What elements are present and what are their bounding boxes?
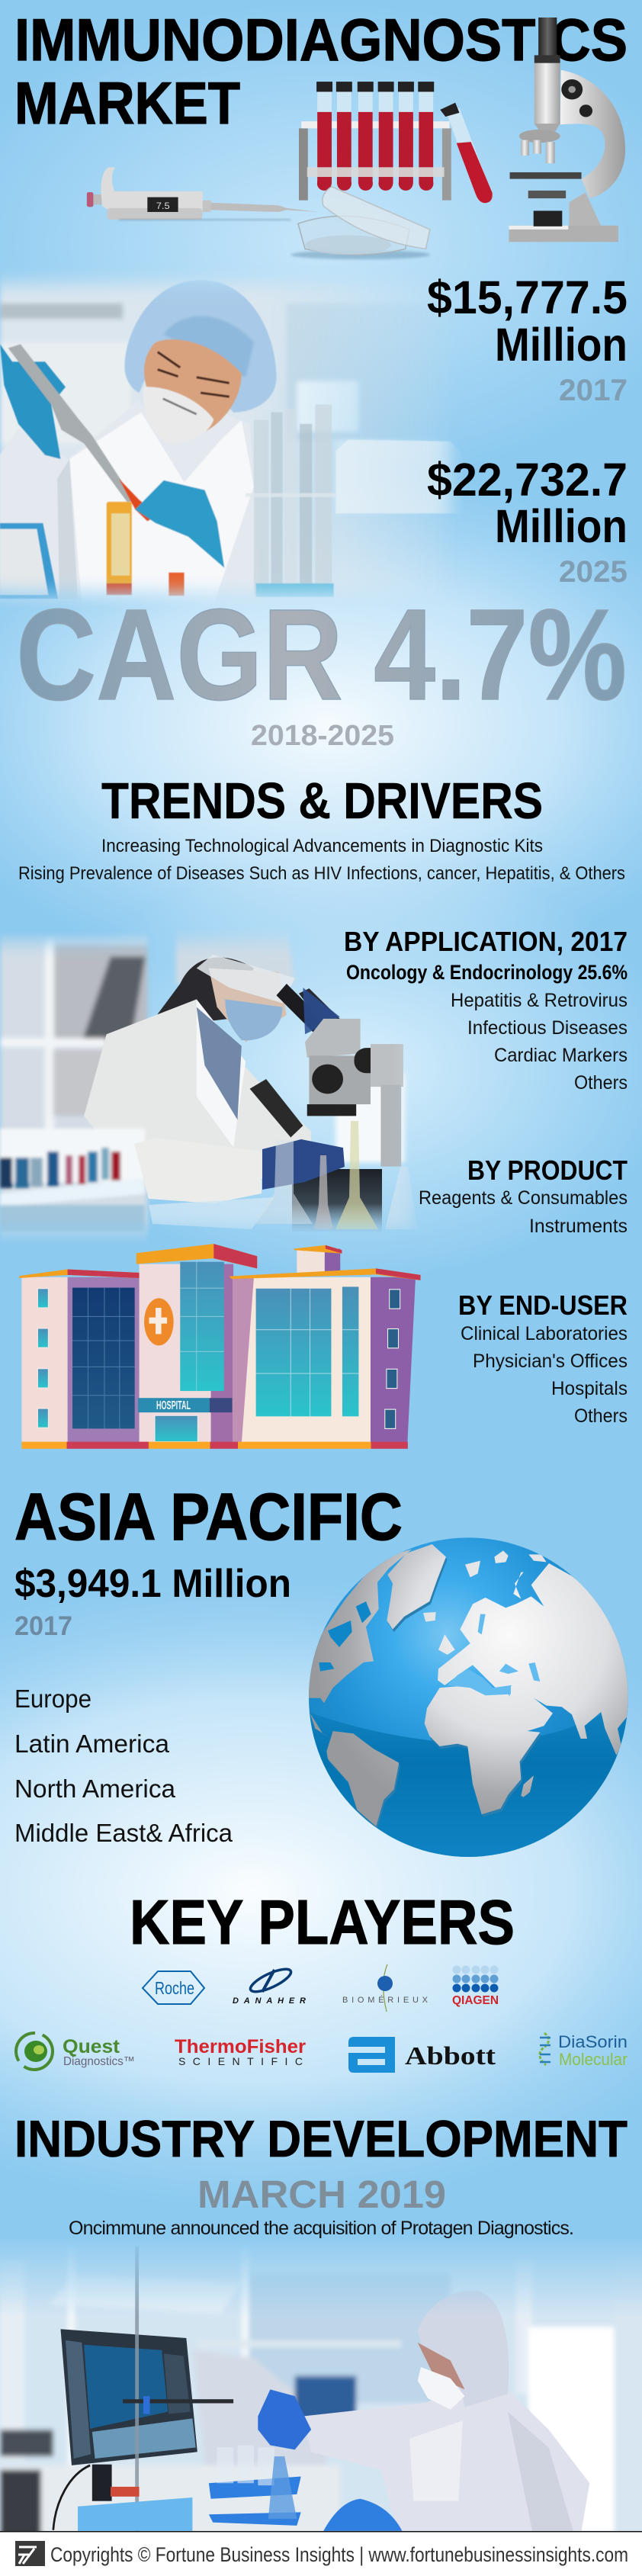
- by end-user: BY END-USER: [458, 1290, 628, 1321]
- face and goggles: [209, 968, 287, 1042]
- shirt: [197, 1007, 242, 1119]
- icon: microscope: [509, 18, 625, 242]
- title: [14, 6, 628, 137]
- glass tubes: [254, 404, 334, 597]
- region: Asia Pacific: [14, 1480, 403, 1641]
- face mask: [143, 386, 214, 435]
- right glove: [135, 480, 224, 568]
- market value 2025: $22,732.7: [427, 454, 628, 506]
- eyepiece: [250, 1079, 303, 1137]
- logo: Quest Diagnostics: Quest: [63, 2036, 120, 2057]
- icon: petri dish: [291, 187, 430, 259]
- icon: test tube rack: [299, 82, 451, 201]
- microscope: [276, 984, 320, 1033]
- lab coat: [0, 400, 262, 607]
- logo: Danaher: DANAHER: [233, 1996, 306, 2006]
- right wing: [233, 1277, 374, 1444]
- key players heading: KEY PLAYERS: [130, 1887, 515, 1958]
- region: Asia Pacific: $3,949.1 Million: [14, 1562, 291, 1606]
- photo: scientist at microscope: [0, 926, 418, 1245]
- logo: Danaher: [233, 1965, 306, 2006]
- by end-user: [458, 1290, 628, 1427]
- logo: Qiagen: QIAGEN: [452, 1994, 499, 2007]
- icon: hospital building: [19, 1244, 420, 1449]
- sample tubes: [0, 1129, 145, 1182]
- market value 2017: $15,777.5: [427, 271, 628, 323]
- pipette: [8, 344, 135, 502]
- industry development: Oncimmune announced the acquisition of Protagen Diagnostics.: [69, 2218, 574, 2239]
- trends and drivers: TRENDS & DRIVERS: [101, 772, 543, 830]
- hair: [156, 957, 254, 1023]
- by product: [419, 1155, 628, 1237]
- face and goggles: [418, 2343, 464, 2389]
- logo: Thermo Fisher Scientific: ThermoFisher: [175, 2036, 306, 2057]
- other regions list: Europe: [14, 1685, 91, 1713]
- logo: Thermo Fisher Scientific: SCIENTIFIC: [178, 2055, 303, 2067]
- blue tray: [78, 2497, 192, 2531]
- flasks: [255, 1140, 313, 1224]
- logo: bioMerieux: [342, 1964, 429, 2012]
- logo: bioMerieux: BIOMÉRIEUX: [342, 1995, 429, 2005]
- market value 2017: [427, 271, 628, 407]
- region: Asia Pacific: 2017: [14, 1611, 72, 1641]
- mask: [418, 2367, 464, 2410]
- by application: Others: [574, 1072, 628, 1094]
- other regions list: Latin America: [14, 1730, 170, 1758]
- industry development: [14, 2110, 628, 2239]
- by product: Reagents & Consumables: [419, 1187, 628, 1209]
- market value 2017: Million: [495, 319, 628, 371]
- logo: Quest Diagnostics: [16, 2033, 135, 2070]
- by end-user: Hospitals: [551, 1378, 628, 1399]
- black table: [292, 1169, 382, 1232]
- by application: Infectious Diseases: [467, 1017, 628, 1039]
- suit body: [303, 2385, 589, 2531]
- base strip: [21, 1442, 67, 1449]
- stand: [135, 2247, 139, 2533]
- lab background: [0, 274, 442, 592]
- hood: [418, 2291, 509, 2407]
- photo: scientist with pipette: [0, 274, 459, 603]
- logo: Qiagen: [452, 1966, 499, 2007]
- by end-user: Physician's Offices: [473, 1351, 628, 1372]
- logo: DiaSorin Molecular: [540, 2032, 628, 2069]
- lab coat: [84, 999, 311, 1178]
- logo: Thermo Fisher Scientific: [175, 2036, 306, 2067]
- blue glove: [262, 1139, 345, 1190]
- logo: DiaSorin Molecular: Molecular: [559, 2050, 628, 2069]
- hospital sign: HOSPITAL: [156, 1399, 191, 1412]
- other regions list: Middle East& Africa: [14, 1819, 233, 1847]
- tube rack: [209, 2476, 301, 2526]
- title: MARKET: [14, 69, 240, 137]
- icon: pipette: [87, 167, 319, 221]
- trends and drivers: Increasing Technological Advancements in Diagnostic Kits: [101, 836, 543, 856]
- by application: Cardiac Markers: [494, 1045, 628, 1066]
- lower bench: [0, 1121, 418, 1232]
- logo: Roche: Roche: [155, 1978, 194, 1998]
- market value 2025: [427, 454, 628, 589]
- papers: [149, 1197, 274, 1229]
- logo: Roche: [143, 1971, 204, 2004]
- region: Asia Pacific: ASIA PACIFIC: [14, 1480, 403, 1554]
- hair net: [124, 280, 277, 413]
- gloves: [258, 2389, 311, 2449]
- coat sleeve: [134, 1138, 262, 1203]
- market value 2025: Million: [495, 500, 628, 552]
- by end-user: Clinical Laboratories: [461, 1323, 628, 1344]
- footer: [0, 2531, 642, 2576]
- center tower: [140, 1264, 213, 1444]
- other regions list: North America: [14, 1775, 176, 1803]
- left wing: [21, 1277, 69, 1444]
- by end-user: Others: [574, 1405, 628, 1427]
- by application: Hepatitis & Retrovirus: [451, 990, 628, 1011]
- icon: globe: [305, 1537, 633, 1861]
- mask: [225, 999, 283, 1040]
- market value 2025: 2025: [559, 555, 628, 589]
- lab background: [0, 2233, 642, 2541]
- face: [144, 339, 242, 432]
- icon: Fortune Business Insights logo: [15, 2541, 45, 2566]
- logo: Abbott: Abbott: [405, 2042, 496, 2070]
- by product: Instruments: [529, 1216, 628, 1237]
- other regions list: [14, 1685, 233, 1847]
- CAGR: 2018-2025: [251, 720, 394, 752]
- icon: pipette: 7.5: [156, 201, 170, 211]
- industry development: MARCH 2019: [197, 2173, 446, 2216]
- logo: Abbott: [348, 2037, 496, 2073]
- logo: Quest Diagnostics: Diagnostics™: [63, 2055, 135, 2068]
- market value 2017: 2017: [559, 374, 628, 407]
- logo: DiaSorin Molecular: DiaSorin: [558, 2032, 628, 2051]
- shelves: [0, 926, 406, 1245]
- by application: BY APPLICATION, 2017: [344, 926, 628, 957]
- photo: scientist in protective suit: [0, 2233, 642, 2541]
- blue device: [0, 523, 58, 599]
- monitor: [60, 2329, 197, 2465]
- left glove: [0, 344, 66, 459]
- orange bottle: [107, 502, 132, 593]
- machine: [335, 439, 463, 513]
- trends and drivers: [18, 772, 625, 884]
- icon: tilted blood tube: [440, 103, 493, 203]
- by application: [344, 926, 628, 1094]
